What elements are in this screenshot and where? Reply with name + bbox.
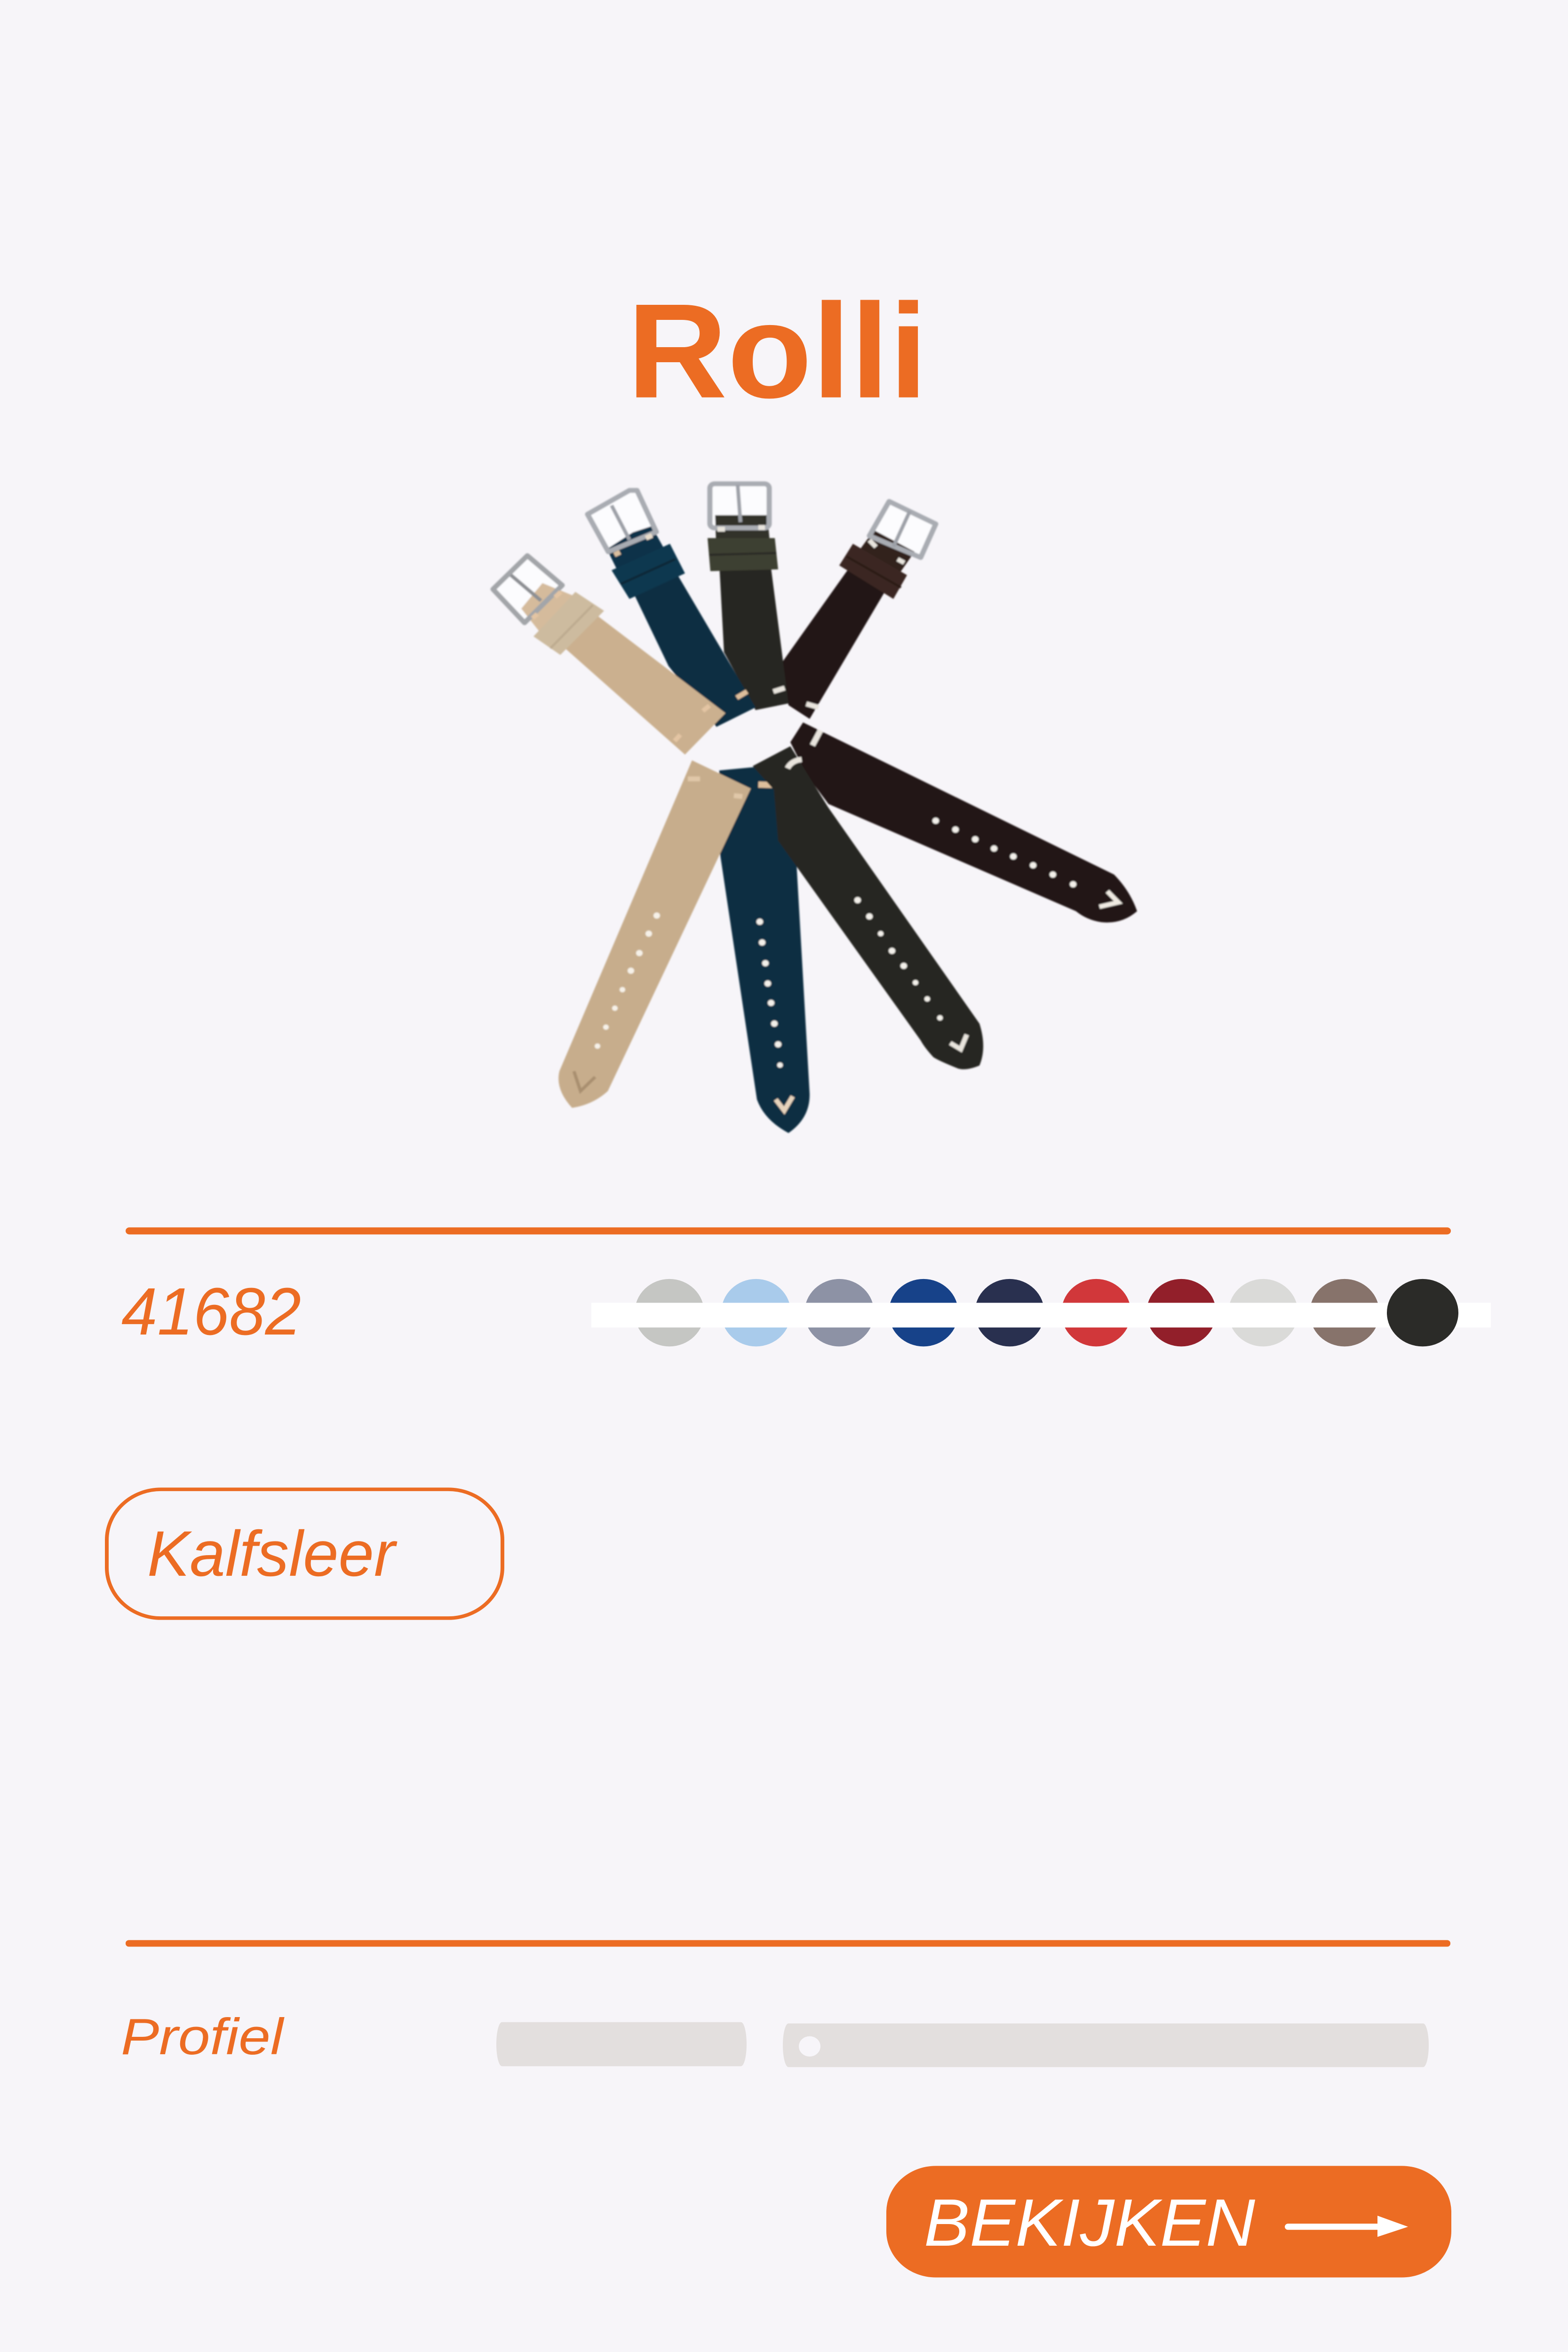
divider: bottom [126,1940,1450,1947]
strap: beige upper [493,556,725,755]
profile label: Profiel [121,2008,285,2065]
button: BEKIJKEN [886,2166,1451,2278]
strap: olive lower [753,746,983,1069]
title: Rolli [627,276,928,426]
icon: arrow [1285,2216,1408,2237]
button: BEKIJKEN: BEKIJKEN [924,2185,1256,2260]
strap: brown upper [782,501,936,719]
strap: brown lower [790,723,1137,922]
profile bar: short [496,2022,747,2066]
colour swatches [591,1279,1491,1346]
strap: beige lower [558,760,751,1108]
strap: navy upper [588,491,756,727]
product photo: fan of watch straps [493,484,1137,1133]
material tag: Kalfsleer: Kalfsleer [147,1518,398,1589]
material tag: Kalfsleer [107,1489,502,1618]
article number: 41682 [121,1274,301,1349]
strap: olive upper [708,484,788,710]
strap: navy lower [719,766,810,1133]
divider: top [126,1227,1451,1234]
profile bar: long [783,2024,1429,2067]
